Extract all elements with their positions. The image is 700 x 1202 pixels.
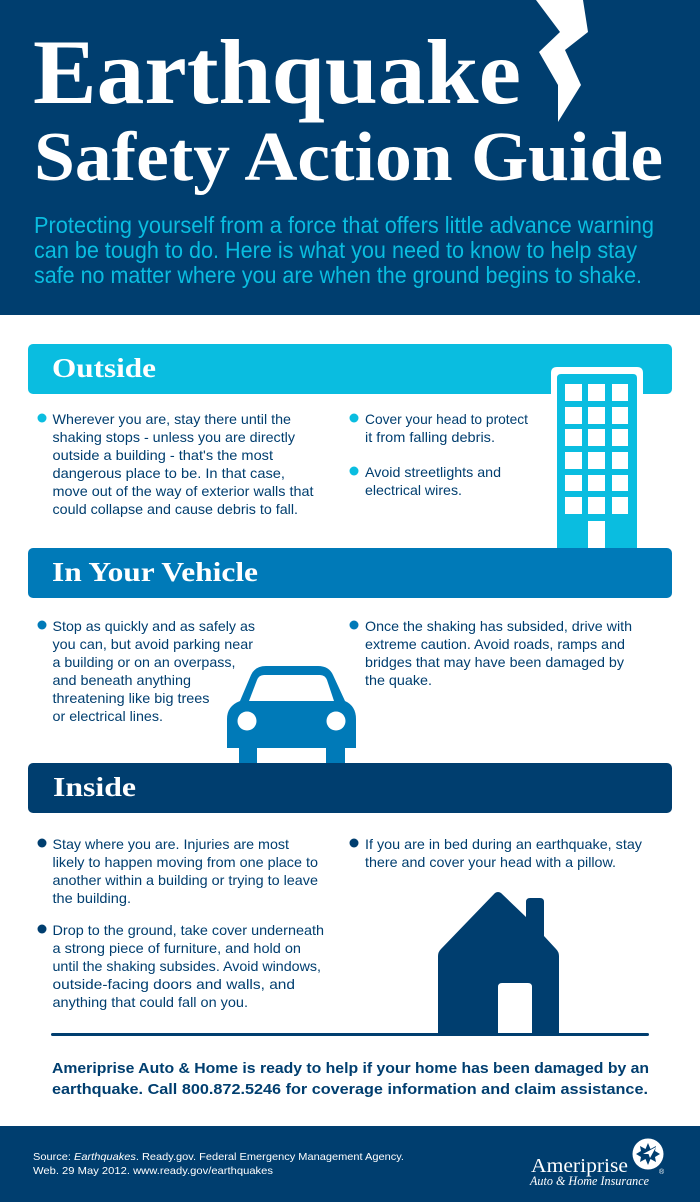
bullet text: drop and cover: a strong piece of furniture, and hold on [52, 940, 301, 956]
source text: Source: Earthquakes . Ready.gov. Federal Emergency Management Agency. [33, 1151, 404, 1163]
panel: inside [28, 763, 672, 1098]
bullet text: stay where you are: outside a building - that's the most [52, 447, 273, 463]
bullet text: cover your head: it from falling debris. [365, 429, 495, 445]
bullet text: stay where you are [38, 836, 318, 906]
bullet text: drive with caution [350, 618, 632, 688]
bullet text: stop safely: or electrical lines. [52, 708, 163, 724]
bullet text: avoid streetlights: Avoid streetlights and [365, 464, 501, 480]
intro text: can be tough to do. Here is what you need to know to help stay [34, 237, 637, 263]
heading bar: outside: Outside [52, 353, 156, 383]
bullet text: cover your head: Cover your head to protect [365, 411, 528, 427]
panel: header [0, 0, 700, 315]
bullet text: stay where you are: move out of the way of exterior walls that [52, 483, 314, 499]
bullet text: stay where you are: shaking stops - unless you are directly [52, 429, 295, 445]
icon: building [551, 367, 643, 548]
bullet text: stop safely: and beneath anything [52, 672, 191, 688]
callout: coverage information: Ameriprise Auto & Home is ready to help if your home has been damaged by an [52, 1060, 649, 1077]
bullet text: stay where you are: the building. [52, 890, 131, 906]
bullet text: drop and cover: outside-facing doors and walls, and [52, 976, 295, 992]
bullet text: drive with caution: extreme caution. Avoid roads, ramps and [365, 636, 625, 652]
intro text: Protecting yourself from a force that offers little advance warning [34, 212, 654, 238]
bullet text: stop safely: threatening like big trees [52, 690, 210, 706]
bullet text: in bed [350, 836, 642, 870]
bullet text: stop safely: a building or on an overpass, [52, 654, 236, 670]
source text: Web. 29 May 2012. www.ready.gov/earthquakes [33, 1165, 273, 1177]
bullet text: stop safely: you can, but avoid parking near [52, 636, 253, 652]
heading bar: outside [28, 344, 672, 394]
heading bar: in your vehicle [28, 548, 672, 598]
icon: car [227, 666, 356, 765]
panel: footer [0, 1126, 700, 1202]
bullet text: stay where you are: could collapse and cause debris to fall. [52, 501, 298, 517]
bullet text: drive with caution: Once the shaking has subsided, drive with [365, 618, 632, 634]
panel: in your vehicle [28, 548, 672, 765]
bullet text: stay where you are: dangerous place to be. In that case, [52, 465, 285, 481]
title: Safety Action Guide [34, 119, 663, 196]
logo: Ameriprise: Ameriprise [531, 1155, 628, 1177]
source text [33, 1151, 404, 1177]
bullet text: avoid streetlights [350, 464, 501, 498]
bullet text: stay where you are: likely to happen moving from one place to [52, 854, 318, 870]
bullet text: drop and cover: anything that could fall on you. [52, 994, 248, 1010]
intro text [34, 212, 654, 288]
bullet text: drop and cover [38, 922, 324, 1010]
logo: Ameriprise [529, 1138, 665, 1188]
intro text: safe no matter where you are when the ground begins to shake. [34, 262, 642, 288]
bullet text: in bed: there and cover your head with a pillow. [365, 854, 616, 870]
bullet text: stay where you are: Stay where you are. Injuries are most [52, 836, 289, 852]
heading bar: in your vehicle: In Your Vehicle [52, 557, 258, 587]
bullet text: stop safely: Stop as quickly and as safely as [52, 618, 255, 634]
panel: outside [28, 344, 672, 548]
heading bar: inside [28, 763, 672, 813]
icon: lightning bolt [536, 0, 588, 122]
title [33, 21, 663, 196]
logo: Ameriprise: Auto & Home Insurance [529, 1174, 649, 1188]
callout: coverage information: earthquake. Call 800.872.5246 for coverage information and claim assistance. [52, 1081, 648, 1098]
icon: house [51, 892, 649, 1036]
bullet text: in bed: If you are in bed during an earthquake, stay [365, 836, 642, 852]
bullet text: stay where you are [38, 411, 314, 517]
heading bar: inside: Inside [53, 772, 136, 802]
bullet text: drop and cover: Drop to the ground, take cover underneath [52, 922, 324, 938]
bullet text: cover your head [350, 411, 528, 445]
bullet text: stay where you are: another within a building or trying to leave [52, 872, 318, 888]
bullet text: stay where you are: Wherever you are, stay there until the [52, 411, 291, 427]
callout: coverage information [52, 1060, 649, 1098]
bullet text: avoid streetlights: electrical wires. [365, 482, 462, 498]
bullet text: stop safely [38, 618, 255, 724]
bullet text: drive with caution: bridges that may have been damaged by [365, 654, 624, 670]
logo: Ameriprise: ® [659, 1168, 665, 1176]
bullet text: drop and cover: until the shaking subsides. Avoid windows, [52, 958, 321, 974]
title: Earthquake [33, 21, 521, 123]
bullet text: drive with caution: the quake. [365, 672, 432, 688]
